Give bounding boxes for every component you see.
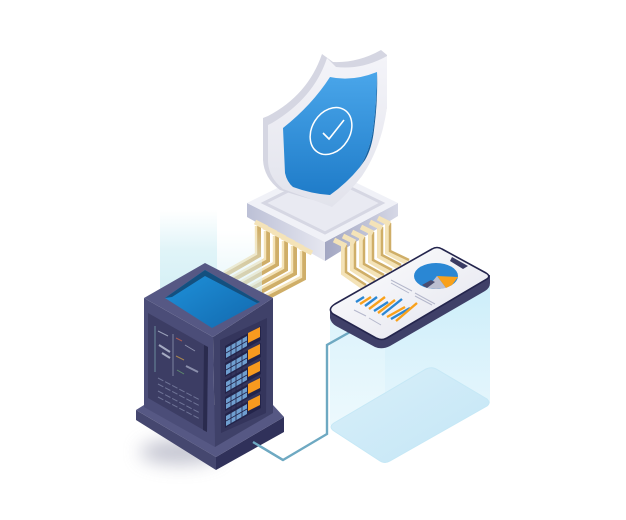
- server rack: [136, 263, 284, 470]
- security chip: [247, 166, 398, 261]
- glass box under phone: [330, 285, 490, 463]
- drawers: [225, 326, 261, 428]
- drawer bay: [220, 318, 267, 433]
- server right face: [213, 298, 273, 447]
- cable start over server base: [253, 442, 283, 460]
- light column above server: [160, 210, 217, 300]
- left chip pins: [224, 222, 312, 298]
- bar chart: [356, 297, 417, 321]
- server top: [144, 263, 273, 337]
- server left face: [144, 298, 215, 447]
- phone: [330, 248, 490, 348]
- right chip pins: [334, 218, 409, 287]
- pie chart: [414, 263, 458, 289]
- legend lines: [354, 280, 435, 325]
- code panel: [148, 313, 208, 432]
- translucent column face over pins: [217, 230, 262, 302]
- server base: [136, 405, 284, 470]
- shield: [263, 50, 387, 207]
- ground shadow of server: [140, 440, 220, 464]
- check icon: [302, 100, 360, 162]
- notch: [450, 257, 468, 269]
- cable: [253, 332, 350, 460]
